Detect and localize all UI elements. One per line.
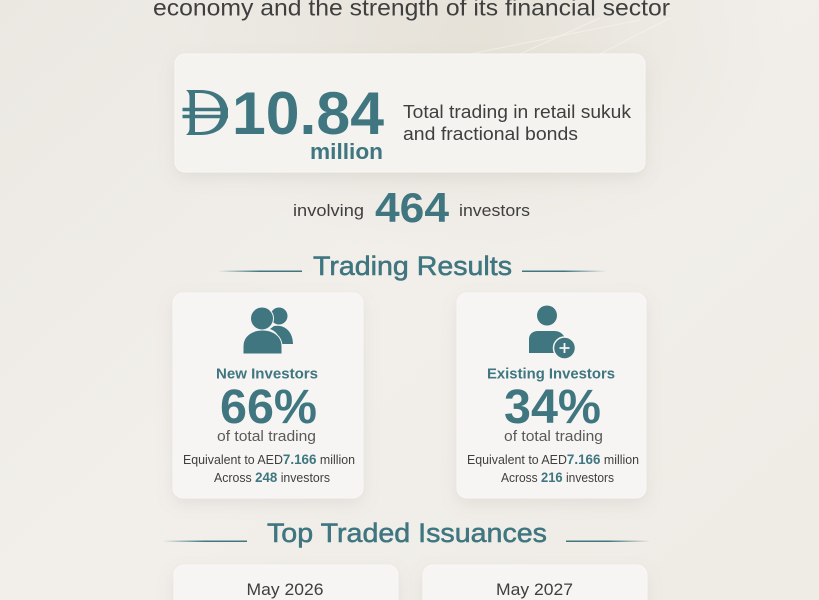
description	[403, 102, 632, 144]
details: Equivalent to AED7.166 million	[467, 452, 639, 467]
panel: May 2026 issuance	[174, 565, 398, 600]
investor count line	[293, 184, 530, 231]
icon: two people	[243, 307, 293, 354]
icon: dirham symbol	[182, 90, 228, 135]
details: Across 248 investors	[214, 470, 330, 485]
investor count line: investors	[459, 202, 530, 220]
caption: of total trading	[217, 428, 316, 445]
investor count line: involving	[293, 202, 364, 220]
details: Equivalent to AED7.166 million	[183, 452, 355, 467]
details	[467, 452, 639, 485]
total value: 10.84	[232, 80, 385, 147]
caption: of total trading	[504, 428, 603, 445]
panel: May 2027 issuance	[423, 565, 647, 600]
panel: May 2026 issuance: May 2026	[246, 580, 324, 599]
description: and fractional bonds	[403, 124, 578, 144]
heading: trading results: Trading Results	[313, 251, 512, 281]
percentage: 66%	[220, 381, 317, 434]
label: New Investors	[216, 366, 318, 382]
heading: top traded issuances: Top Traded Issuances	[267, 518, 547, 548]
icon: person with plus	[529, 306, 576, 359]
percentage: 34%	[504, 381, 601, 434]
panel: May 2027 issuance: May 2027	[496, 580, 573, 599]
panel: new investors	[173, 293, 363, 498]
details: Across 216 investors	[501, 470, 614, 485]
label: Existing Investors	[487, 366, 615, 382]
description: Total trading in retail sukuk	[403, 102, 632, 122]
unit: million	[310, 139, 383, 164]
panel: existing investors	[457, 293, 646, 498]
investor count line: 464	[375, 184, 450, 231]
details	[183, 452, 355, 485]
panel: total trading	[175, 54, 645, 172]
